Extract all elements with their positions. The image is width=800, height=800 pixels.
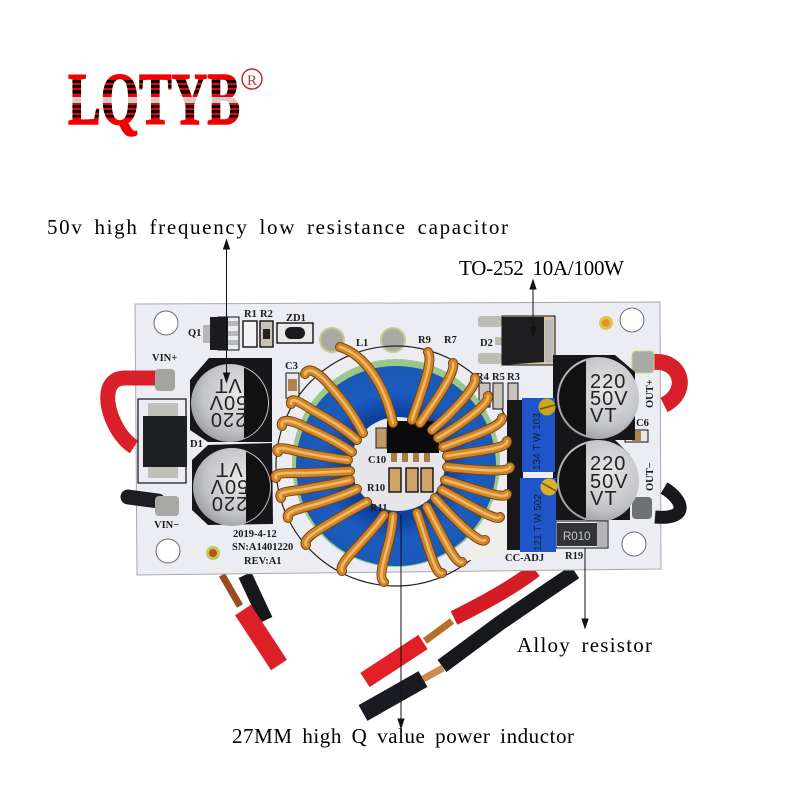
registered mark [242,69,262,89]
circuit board [135,302,661,575]
mounting holes [154,308,646,563]
bottom right wires [363,570,575,713]
right capacitor top [557,357,639,439]
board right text: R7 [444,335,457,346]
alloy resistor R010: R010 [563,531,590,543]
alloy resistor R010 [556,521,608,548]
left capacitor bottom: 50V [210,475,248,497]
board left text: ZD1 [286,313,306,324]
board left text: 2019-4-12 [233,529,277,540]
arrow: capacitor callout [224,240,230,382]
resistors R4 R5 R3 [479,383,518,409]
infographic canvas [48,68,688,748]
board left text: R2 [260,309,273,320]
output red wire [654,362,680,405]
arrow: inductor callout [398,515,404,728]
inductor coil outline on PCB [276,346,516,586]
bottom left wires [222,575,279,665]
board left text: VIN+ [152,353,177,364]
blue trimmer bottom [520,478,558,552]
label: capacitor: 50v high frequency low resistance capacitor [47,215,508,239]
board left text [152,309,368,567]
board right text: CC-ADJ [505,553,544,564]
R1 R2 resistors [243,321,273,347]
left capacitor bases [190,358,273,525]
trimmer column [507,400,523,550]
left capacitor top: VT [214,374,242,396]
input red wire [108,378,156,447]
copper windings [275,347,510,582]
inner hole with components: R11 [370,503,388,514]
Q1 transistor [203,317,239,350]
board left text: L1 [356,338,368,349]
left capacitor top: 50V [209,391,247,413]
left capacitor top: 220 [210,408,246,430]
inner hole with components [351,417,445,514]
inner hole with components: C10 [368,455,386,466]
left capacitor top [191,364,269,442]
C3 capacitor [286,373,299,398]
board right text: OUT+ [645,379,656,408]
white potting lump [465,497,521,561]
board right text: R3 [507,372,520,383]
right capacitor bottom: 50V [590,471,629,493]
arrow: TO-252 callout [530,280,536,336]
board right text: C6 [636,418,649,429]
board right text: R19 [565,551,583,562]
right capacitor bases [553,355,635,520]
board left text: C3 [285,361,298,372]
right capacitor top: 220 [590,371,626,393]
left capacitor bottom [193,448,271,526]
ZD1 diode [277,323,313,343]
input black wire [128,497,158,501]
inner hole with components: R10 [367,483,385,494]
board right text: R4 [476,372,490,383]
solder pads [155,328,654,519]
board left text: SN:A1401220 [232,542,293,553]
left capacitor bottom: VT [215,458,243,480]
board right text: R5 [492,372,505,383]
label: alloy resistor: Alloy resistor [517,633,652,657]
board left text: D1 [190,439,203,450]
board right text [418,335,656,564]
right capacitor bottom [557,440,639,520]
fiducial dots [206,316,613,560]
toroid inductor [292,359,521,567]
right capacitor bottom: 220 [590,453,626,475]
blue trimmer top [522,398,556,472]
board right text: OUT− [645,462,656,491]
right capacitor top: 50V [590,388,629,410]
board right text: D2 [480,338,493,349]
board left text: R1 [244,309,257,320]
D1 diode [138,399,187,483]
right capacitor top: VT [590,405,618,427]
board right text: R9 [418,335,431,346]
left capacitor bottom: 220 [211,492,247,514]
output black wire [655,488,680,517]
C6 capacitor [625,430,648,442]
blue trimmer top: 134 T W 103 [532,413,543,470]
board left text: REV:A1 [244,556,282,567]
board left text: VIN− [154,520,179,531]
label: TO-252: TO-252 10A/100W [459,256,624,280]
logo: LQTYB: LQTYB [68,59,240,141]
board left text: Q1 [188,328,201,339]
D2 MOSFET [478,316,555,365]
arrow: alloy resistor callout [582,548,588,628]
blue trimmer bottom: 121 T W 502 [533,494,544,551]
registered mark: R [247,73,257,89]
right capacitor bottom: VT [590,488,618,510]
label: inductor: 27MM high Q value power inductor [232,724,574,748]
